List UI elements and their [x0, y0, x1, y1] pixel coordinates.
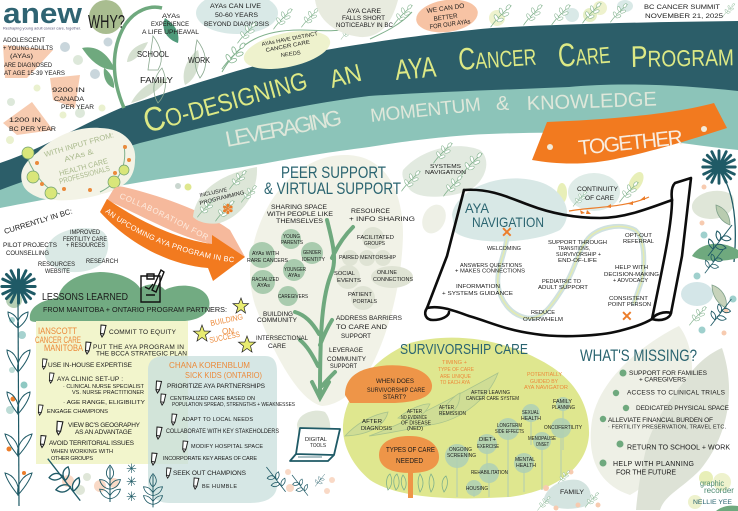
decoration: left flower stalk	[2, 270, 35, 506]
panel: AYA navigation scroll: SUPPORT THROUGH	[548, 240, 607, 246]
statistics: adolescents and young adults: AT AGE 15-39 YEARS	[4, 70, 66, 77]
trees: types of survivorship care: ONGOING	[449, 447, 472, 453]
panel: what's missing: + CAREGIVERS	[639, 376, 687, 384]
panel: peer support and virtual support: WITH PEOPLE LIKE	[267, 211, 334, 218]
statistics: adolescents and young adults: + YOUNG ADULTS	[3, 45, 54, 52]
plant: why stem with leaves	[82, 7, 206, 108]
section: lessons learned: FROM MANITOBA + ONTARIO PROGRAM PARTNERS:	[43, 305, 227, 314]
cloud: with input from: HEALTH CARE	[58, 156, 109, 178]
title: AN	[327, 59, 365, 94]
family: FAMILY	[560, 489, 585, 496]
callout: care falls short: AYA CARE	[347, 8, 382, 15]
branch leaves	[345, 373, 498, 436]
trees: types of survivorship care: DIET+	[479, 437, 496, 443]
section: currently in BC	[3, 207, 118, 275]
panel: peer support and virtual support: AYAs WITH	[252, 251, 279, 257]
callout: when does survivorship care start: SURVIVORSHIP CARE	[367, 387, 426, 394]
panel: survivorship care: NO EVIDENCE	[401, 415, 427, 421]
panel: Ian Scott, CancerCare Manitoba: OTHER GROUPS	[51, 456, 93, 462]
panel: survivorship care: AFTER	[439, 405, 454, 411]
panel: survivorship care	[343, 338, 589, 498]
icon: end marker: ✕	[621, 308, 633, 324]
icon: digital tools laptop	[290, 411, 340, 461]
text: life upheaval: FAMILY	[140, 75, 173, 85]
panel: Ian Scott, CancerCare Manitoba: USE IN-HOUSE EXPERTISE	[48, 362, 133, 369]
statistics: adolescents and young adults: 1200 IN	[9, 117, 41, 124]
panel: Ian Scott, CancerCare Manitoba: COMMIT TO EQUITY	[109, 329, 177, 336]
title: CARE	[556, 33, 611, 74]
inclusive programming	[175, 167, 257, 224]
panel: AYA navigation scroll: AYA	[465, 200, 490, 216]
trees: types of survivorship care: HOUSING	[466, 486, 488, 492]
callout: live beyond diagnosis: 50-60 YEARS	[215, 12, 259, 19]
callout: care falls short	[315, 0, 413, 39]
panel: peer support and virtual support: YOUNGER	[284, 267, 306, 273]
callout: live beyond diagnosis: AYAs CAN LIVE	[210, 3, 262, 10]
tree: types of care needed: NEEDED	[396, 456, 423, 465]
subtitle: KNOWLEDGE	[526, 88, 657, 115]
panel: survivorship care: REMISSION	[439, 411, 466, 417]
trees: types of survivorship care: ONCOFERTILITY	[544, 425, 582, 431]
trees: types of survivorship care: HEALTH	[521, 416, 541, 422]
callout: building on success	[194, 298, 256, 352]
decoration: bottom plants	[48, 459, 335, 507]
callout: distinct cancer care needs	[222, 8, 380, 76]
continuity of care: CONTINUITY	[577, 186, 619, 193]
trees: types of survivorship care	[445, 397, 582, 497]
text: life upheaval	[137, 13, 210, 85]
trees: types of survivorship care: MENOPAUSE	[528, 436, 556, 442]
trees: types of survivorship care: LONGTERM	[497, 423, 522, 429]
logo: anew: Reshaping young adult cancer care, together.	[3, 26, 81, 30]
trees: types of survivorship care: ONSET	[536, 442, 549, 448]
statistics: adolescents and young adults: ADOLESCENT	[3, 37, 45, 44]
panel: peer support and virtual support: CONNECTIONS	[373, 277, 413, 283]
panel: survivorship care: TYPE OF CARE	[438, 367, 474, 373]
panel: peer support and virtual support: GROUPS	[364, 241, 385, 247]
panel: what's missing	[580, 326, 730, 510]
panel: what's missing: RETURN TO SCHOOL + WORK	[627, 444, 730, 452]
panel: peer support and virtual support: EVENTS	[337, 278, 361, 284]
panel: peer support and virtual support: CAREGIVERS	[278, 294, 308, 300]
panel: Ian Scott, CancerCare Manitoba: VIEW BC'S GEOGRAPHY	[68, 422, 141, 429]
trees: types of survivorship care: HEALTH	[516, 463, 536, 469]
callout: building on success: ON	[222, 327, 234, 336]
panel: peer support and virtual support: PATIENT	[348, 292, 373, 298]
panel: survivorship care: AYA NAVIGATOR	[524, 385, 568, 391]
panel: survivorship care: CANCER CARE SYSTEM	[466, 396, 519, 402]
panel: survivorship care: (NED)	[407, 426, 423, 432]
trees: types of survivorship care: PLANNING	[552, 405, 575, 411]
panel: Ian Scott, CancerCare Manitoba: WHEN WORKING WITH	[51, 449, 113, 455]
panel: Ian Scott, CancerCare Manitoba: AS AN ADVANTAGE	[75, 429, 133, 436]
panel: AYA navigation scroll	[425, 178, 691, 336]
panel: peer support and virtual support: PEER SUPPORT	[281, 164, 386, 182]
inclusive programming: ✽	[222, 201, 234, 217]
trees: types of survivorship care: EXERCISE	[477, 444, 499, 450]
panel: peer support and virtual support: ADDRESS BARRIERS	[336, 315, 403, 322]
inclusive programming: INCLUSIVE	[199, 187, 228, 199]
panel: Chana Korenblum, Sick Kids: BE HUMBLE	[202, 484, 237, 490]
callout: when does survivorship care start	[345, 365, 432, 403]
panel: peer support and virtual support: THEMSELVES	[276, 218, 324, 225]
panel: survivorship care: OF DISEASE	[401, 420, 431, 426]
panel: peer support and virtual support: BUILDING	[263, 311, 293, 318]
trees: types of survivorship care: FAMILY	[553, 399, 572, 405]
title: CANCER	[457, 37, 537, 77]
section: currently in BC: PILOT PROJECTS	[3, 242, 58, 249]
trees: types of survivorship care: SCREENING	[447, 453, 476, 459]
callout: care falls short: NOTICEABLY IN BC	[336, 22, 393, 29]
section: currently in BC: RESEARCH	[86, 258, 118, 265]
panel: what's missing: HELP WITH PLANNING	[613, 461, 694, 468]
panel: Chana Korenblum, Sick Kids: POPULATION SPREAD, STRENGTHS + WEAKNESSES	[172, 402, 295, 408]
panel: AYA navigation scroll: NAVIGATION	[472, 214, 544, 230]
event details: BC CANCER SUMMIT	[644, 4, 720, 11]
trees: types of survivorship care: REHABILITATION	[471, 470, 508, 476]
event details: NOVEMBER 21, 2025	[645, 13, 723, 20]
panel: survivorship care: AFTER LEAVING	[471, 390, 510, 396]
section: currently in BC: FERTILITY CARE	[63, 236, 108, 243]
callout: care falls short: FALLS SHORT	[342, 15, 385, 22]
panel: Ian Scott, CancerCare Manitoba: MANITOBA	[44, 343, 83, 353]
callout: distinct cancer care needs: NEEDS	[280, 50, 301, 59]
panel: Chana Korenblum, Sick Kids	[148, 356, 295, 503]
panel: AYA navigation scroll: REFERRAL	[623, 239, 654, 245]
callout: distinct cancer care needs: AYAs HAVE DISTINCT	[261, 31, 319, 48]
panel: survivorship care: TIMING +	[442, 360, 467, 366]
panel: AYA navigation scroll: DECISION-MAKING	[604, 272, 659, 278]
panel: Chana Korenblum, Sick Kids: MODIFY HOSPITAL SPACE	[191, 444, 263, 450]
continuity of care	[557, 169, 649, 214]
credit: graphic recorder: graphic	[700, 478, 725, 488]
subtitle: &	[496, 93, 510, 115]
tree: types of care needed	[379, 436, 439, 498]
section: lessons learned: LESSONS LEARNED	[42, 292, 128, 303]
panel: peer support and virtual support: & VIRTUAL SUPPORT	[264, 180, 401, 198]
panel: AYA navigation scroll: REDUCE	[531, 310, 555, 316]
trees: types of survivorship care: SEXUAL	[522, 410, 539, 416]
trees: types of survivorship care: MENTAL	[515, 457, 535, 463]
callout: building on success: SUCCESS	[209, 330, 241, 345]
panel: peer support and virtual support: SUPPORT	[330, 363, 357, 370]
text: life upheaval: EXPERIENCE	[151, 21, 190, 28]
panel: peer support and virtual support: RESOURCE	[351, 208, 391, 215]
panel: peer support and virtual support: IDENTITY	[302, 257, 325, 263]
callout: when does survivorship care start: WHEN DOES	[376, 378, 415, 385]
panel: what's missing: · FERTILITY PRESERVATION, TRAVEL ETC.	[608, 424, 726, 430]
callout: live beyond diagnosis: BEYOND DIAGNOSIS	[204, 21, 270, 28]
panel: peer support and virtual support: RARE CANCERS	[247, 258, 288, 264]
section: currently in BC: COUNSELLING	[6, 250, 49, 257]
credit: graphic recorder: recorder	[704, 485, 734, 495]
panel: survivorship care: TO EACH AYA	[440, 380, 470, 386]
why heading: WHY?	[88, 12, 125, 32]
event details	[644, 4, 723, 20]
section: currently in BC: WEBSITE	[45, 268, 71, 275]
panel: AYA navigation scroll: WELCOMING	[487, 246, 521, 252]
panel: peer support and virtual support: GENDER	[303, 250, 321, 256]
panel: what's missing: ACCESS TO CLINICAL TRIALS	[627, 390, 726, 396]
title: CO-DESIGNING	[139, 59, 311, 141]
title: AYA	[394, 51, 438, 87]
panel: AYA navigation scroll: INFORMATION	[456, 284, 500, 290]
panel: Ian Scott, CancerCare Manitoba: AYA CLINIC SET-UP :	[57, 376, 123, 383]
trees: types of survivorship care: SIDE EFFECTS	[495, 429, 524, 435]
panel: survivorship care: DIAGNOSIS	[361, 426, 392, 432]
panel: peer support and virtual support: YOUNG	[283, 234, 300, 240]
panel: Chana Korenblum, Sick Kids: SICK KIDS (ONTARIO)	[185, 371, 262, 380]
tree: types of care needed: TYPES OF CARE	[386, 445, 435, 454]
panel: AYA navigation scroll: PEDIATRIC TO	[542, 279, 582, 285]
panel: AYA navigation scroll: TRANSITIONS,	[558, 246, 590, 252]
panel: peer support and virtual support: SOCIAL	[334, 271, 355, 277]
banner: together: TOGETHER	[577, 126, 684, 160]
panel: peer support and virtual support: PORTALS	[353, 299, 377, 305]
section: currently in BC: CURRENTLY IN BC:	[3, 207, 73, 236]
subtitle	[223, 88, 657, 152]
arrow: collaboration	[100, 186, 245, 281]
cloud: with input from: AYAs &	[63, 147, 94, 164]
panel: survivorship care: SURVIVORSHIP CARE	[400, 342, 528, 358]
banner: together	[532, 103, 727, 164]
panel: AYA navigation scroll: SURVIVORSHIP +	[556, 252, 601, 258]
callout: we can do better: BETTER	[433, 13, 458, 23]
panel: survivorship care: POTENTIALLY	[527, 372, 562, 378]
section: lessons learned	[30, 270, 227, 322]
panel: AYA navigation scroll: + SYSTEMS GUIDANCE	[442, 291, 513, 297]
systems navigation	[401, 142, 486, 237]
panel: what's missing: ALLEVIATE FINANCIAL BURDEN OF	[608, 417, 713, 424]
statistics: adolescents and young adults: PER YEAR	[61, 104, 94, 111]
continuity of care: OF CARE	[585, 195, 615, 202]
panel: Chana Korenblum, Sick Kids: INCORPORATE KEY AREAS OF CARE	[163, 456, 257, 462]
panel: Chana Korenblum, Sick Kids: ADAPT TO LOCAL NEEDS	[182, 417, 253, 423]
panel: Ian Scott, CancerCare Manitoba: IANSCOTT	[38, 326, 77, 336]
panel: peer support and virtual support: RACIALIZED	[252, 277, 279, 283]
panel: AYA navigation scroll: CONSISTENT	[609, 296, 649, 302]
panel: peer support and virtual support: PAIRED MENTORSHIP	[339, 255, 396, 261]
panel: peer support and virtual support	[247, 164, 415, 398]
inclusive programming: PROGRAMMING	[199, 190, 245, 207]
banner: light teal ribbon	[0, 80, 738, 208]
panel: Ian Scott, CancerCare Manitoba	[35, 321, 188, 464]
decoration: bottom plants: ✳	[126, 461, 137, 476]
panel: what's missing: WHAT'S MISSING?	[580, 346, 697, 365]
callout: we can do better: FOR OUR AYAs	[429, 18, 472, 31]
icon: digital tools laptop: TOOLS	[310, 443, 326, 449]
section: currently in BC: IMPROVED	[70, 229, 100, 236]
panel: what's missing: FOR THE FUTURE	[616, 470, 676, 476]
text: life upheaval: AYAs	[162, 13, 181, 20]
credit: graphic recorder	[688, 471, 738, 511]
panel: Ian Scott, CancerCare Manitoba: AVOID TERRITORIAL ISSUES	[49, 440, 135, 447]
panel: AYA navigation scroll: ANSWERS QUESTIONS	[460, 263, 522, 269]
path: navigation route	[498, 226, 644, 318]
statistics: adolescents and young adults: ARE DIAGNOSED	[4, 62, 52, 69]
panel: Ian Scott, CancerCare Manitoba: ENGAGE CHAMPIONS	[47, 409, 108, 415]
panel: peer support and virtual support: CARE	[268, 343, 287, 350]
panel: peer support and virtual support: TO CARE AND	[336, 324, 387, 331]
callout: when does survivorship care start: START?	[383, 394, 406, 401]
panel: Chana Korenblum, Sick Kids: PRIORITIZE AYA PARTNERSHIPS	[167, 383, 266, 390]
callout: building on success: BUILDING	[210, 312, 244, 328]
arrow: collaboration: COLLABORATION FOR	[120, 194, 208, 240]
statistics: adolescents and young adults: 9200 IN	[52, 87, 85, 94]
callout: distinct cancer care needs: CANCER CARE	[265, 39, 311, 54]
panel: peer support and virtual support: LEVERAGE	[329, 347, 364, 354]
statistics: adolescents and young adults: (AYAs)	[10, 53, 33, 60]
subtitle: MOMENTUM	[369, 94, 482, 127]
panel: AYA navigation scroll: OPT-OUT	[625, 233, 653, 239]
panel: AYA navigation scroll: + MAKES CONNECTIONS	[455, 268, 525, 274]
statistics: adolescents and young adults	[3, 37, 112, 144]
scroll outline	[425, 178, 691, 336]
panel: Chana Korenblum, Sick Kids: COLLABORATE WITH KEY STAKEHOLDERS	[166, 428, 280, 435]
statistics: adolescents and young adults: CANADA	[54, 96, 85, 103]
panel: survivorship care: AFTER	[362, 419, 382, 425]
icon: clipboard	[141, 270, 164, 302]
panel: Ian Scott, CancerCare Manitoba: · CLINICAL NURSE SPECIALIST	[63, 384, 145, 390]
subtitle: LEVERAGING	[223, 105, 344, 152]
panel: AYA navigation scroll: POINT PERSON	[608, 302, 651, 308]
panel: peer support and virtual support: PARENTS	[281, 240, 303, 246]
icon: start marker: ✕	[501, 224, 513, 240]
credit: graphic recorder: NELLIE YEE	[693, 499, 733, 506]
decoration: bottom plants: ✳	[126, 474, 137, 489]
panel: what's missing: DEDICATED PHYSICAL SPACE	[636, 405, 730, 412]
panel: peer support and virtual support: FACILITATED	[357, 235, 394, 241]
panel: Chana Korenblum, Sick Kids: SEEK OUT CHAMPIONS	[173, 470, 247, 477]
panel: peer support and virtual support: AYAs	[288, 273, 300, 279]
text: life upheaval: SCHOOL	[137, 49, 169, 59]
decoration: grass	[387, 474, 447, 492]
panel: Ian Scott, CancerCare Manitoba: THE BCCA STRATEGIC PLAN	[96, 350, 187, 358]
section: currently in BC: RESOURCES	[38, 261, 76, 268]
title	[139, 33, 734, 141]
why heading	[88, 0, 125, 34]
panel: AYA navigation scroll: + ADVOCACY	[613, 278, 648, 284]
panel: peer support and virtual support: ONLINE	[377, 270, 397, 276]
panel: Ian Scott, CancerCare Manitoba: PUT THE AYA PROGRAM IN	[93, 344, 184, 351]
decoration: right flowers	[681, 151, 738, 336]
systems navigation: SYSTEMS	[430, 164, 461, 170]
panel: Ian Scott, CancerCare Manitoba: · AGE RANGE, ELIGIBILITY	[63, 400, 145, 406]
panel: peer support and virtual support: COMMUNITY	[257, 317, 298, 324]
panel: AYA navigation scroll: ADULT SUPPORT	[538, 285, 589, 291]
panel: peer support and virtual support: AYAs	[257, 283, 270, 289]
cloud: with input from: WITH INPUT FROM:	[43, 130, 115, 159]
statistics: adolescents and young adults: BC PER YEAR	[9, 126, 56, 133]
panel: Ian Scott, CancerCare Manitoba: VS. NURSE PRACTITIONER	[72, 390, 144, 396]
decoration: top sprigs	[489, 0, 735, 27]
cloud: with input from	[21, 128, 135, 200]
panel: survivorship care: GUIDED BY	[530, 379, 558, 385]
icon: digital tools laptop: DIGITAL	[305, 437, 327, 443]
panel: peer support and virtual support: SUPPORT	[341, 333, 371, 340]
text: life upheaval: A LIFE UPHEAVAL	[142, 29, 199, 36]
callout: live beyond diagnosis	[196, 0, 278, 34]
decoration: bottom plants: ✳	[126, 489, 137, 504]
panel: Chana Korenblum, Sick Kids: CHANA KORENBLUM	[169, 360, 250, 370]
panel: Ian Scott, CancerCare Manitoba: CANCER CARE	[35, 335, 81, 345]
panel: peer support and virtual support: INTERSECTIONAL	[256, 335, 308, 342]
section: currently in BC: + RESOURCES	[66, 242, 106, 249]
systems navigation: NAVIGATION	[425, 170, 466, 176]
panel: what's missing: SUPPORT FOR FAMILIES	[629, 370, 708, 377]
arrow: collaboration: AN UPCOMING AYA PROGRAM IN BC	[105, 209, 234, 262]
panel: peer support and virtual support: + INFO SHARING	[349, 216, 415, 223]
panel: peer support and virtual support: COMMUNITY	[327, 356, 367, 363]
cloud: with input from: PROFESSIONALS	[58, 164, 111, 186]
banner: dark teal ribbon	[0, 21, 738, 190]
panel: AYA navigation scroll: END-OF-LIFE	[558, 258, 597, 264]
panel: survivorship care: ARE UNIQUE	[440, 374, 471, 380]
family	[538, 470, 600, 510]
callout: we can do better: WE CAN DO	[426, 3, 465, 15]
panel: AYA navigation scroll: HELP WITH	[615, 265, 648, 271]
panel: Chana Korenblum, Sick Kids: CENTRALIZED CARE BASED ON	[170, 396, 255, 402]
panel: survivorship care: AFTER	[407, 409, 422, 415]
callout: we can do better	[414, 0, 480, 36]
panel: AYA navigation scroll: OVERWHELM	[523, 317, 563, 323]
panel: peer support and virtual support: SHARING SPACE	[271, 204, 328, 211]
tree: peer support stem	[295, 220, 353, 398]
panel: peer support background	[250, 155, 403, 406]
text: life upheaval: WORK	[188, 55, 210, 65]
